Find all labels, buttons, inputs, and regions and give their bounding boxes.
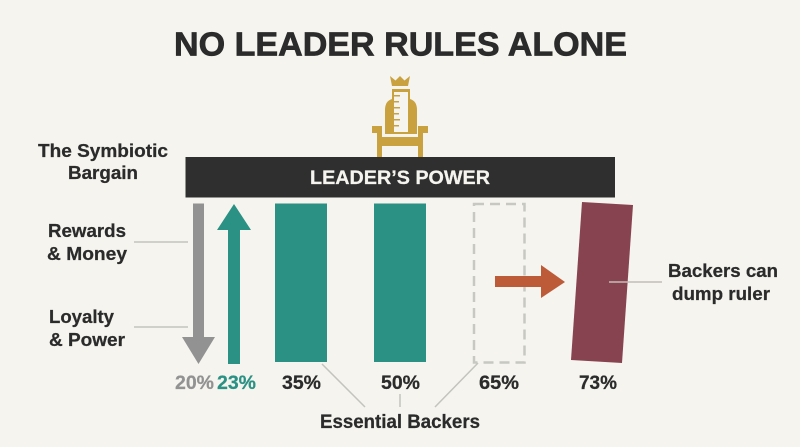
label: rewards and money [47,220,128,264]
label: rewards and money: & Money [47,243,128,264]
bar: 73% tilted [571,202,633,363]
leader line: backers can dump ruler [609,281,662,283]
leader line: loyalty [134,326,188,328]
bar: 35% [275,204,327,362]
title: NO LEADER RULES ALONE [174,26,627,64]
arrow: gray down [182,204,215,364]
value: 35%: 35% [282,372,321,394]
heading: the symbiotic bargain: The Symbiotic [38,140,168,161]
label: loyalty and power [49,306,125,350]
label: backers can dump ruler: dump ruler [672,283,770,304]
value: 73%: 73% [579,372,617,394]
icon: throne with crown [372,76,428,157]
leader's power bar: LEADER’S POWER [310,167,490,189]
label: backers can dump ruler: Backers can [668,260,778,281]
heading: the symbiotic bargain: Bargain [68,162,138,183]
value: 65%: 65% [479,372,519,394]
label: loyalty and power: & Power [49,329,125,350]
label: rewards and money: Rewards [48,220,126,241]
value: 20%: 20% [175,372,214,394]
leader's power bar [186,157,615,198]
label: essential backers: Essential Backers [320,412,480,433]
connector lines: essential backers [322,363,478,407]
bar: 65% dashed [474,204,524,362]
bar: 50% [374,204,426,362]
value: 50%: 50% [381,372,420,394]
heading: the symbiotic bargain [38,140,168,183]
arrow: orange right [495,265,565,298]
value: 23%: 23% [217,372,256,394]
label: backers can dump ruler [668,260,778,304]
label: loyalty and power: Loyalty [49,306,115,327]
arrow: teal up [217,204,251,364]
leader line: rewards [134,241,188,243]
